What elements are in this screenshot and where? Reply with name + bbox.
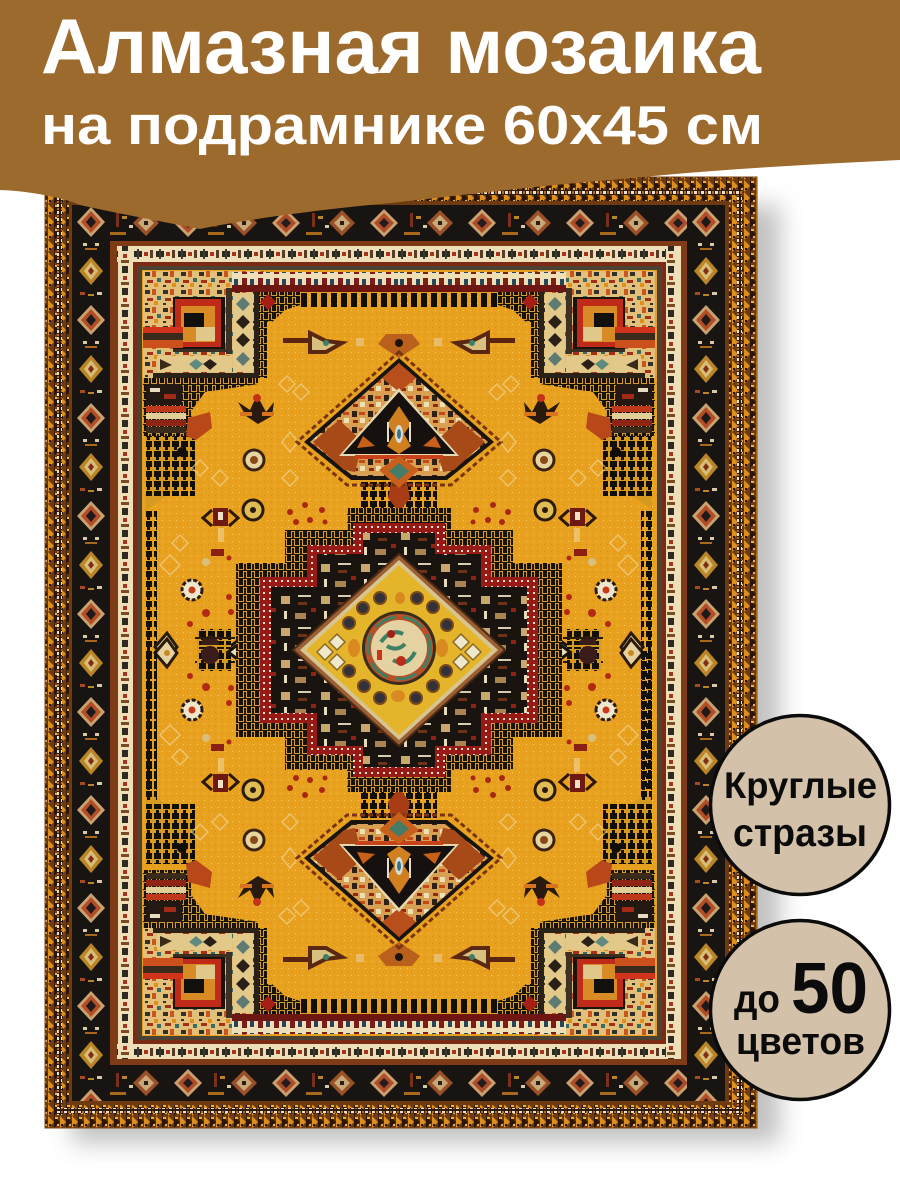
badge text: 50: 50 — [791, 949, 868, 1029]
field motifs: bottom left — [146, 637, 420, 967]
canvas drop shadow — [72, 205, 780, 1143]
grey-brown inner lines — [133, 262, 666, 1044]
outer chevron border — [45, 177, 757, 1128]
corner block: bottom left — [143, 870, 399, 1035]
central round emblem — [362, 611, 436, 685]
title: Алмазная мозаика — [41, 2, 762, 90]
badge text: Круглые: Круглые — [724, 765, 877, 806]
central stepped medallion — [236, 508, 562, 792]
corner block: bottom right — [399, 870, 655, 1035]
lower diamond ornament — [297, 786, 501, 948]
cream diamond stripe — [300, 560, 498, 740]
brown frame line — [69, 201, 729, 1105]
white squares left and right — [317, 634, 481, 670]
central field — [142, 270, 657, 1036]
field left and right tick columns — [146, 650, 652, 800]
cream floral frame top and bottom — [117, 246, 681, 1059]
corner block: top right — [399, 271, 655, 436]
dark block field — [271, 533, 527, 767]
field motifs: top right — [378, 333, 652, 663]
red stepped band — [260, 523, 538, 777]
dark medallion band: bottom — [110, 1065, 687, 1101]
rosette ring — [343, 592, 453, 704]
badge text: цветов: цветов — [736, 1021, 865, 1063]
dark medallion band: left — [72, 205, 110, 1101]
field motifs: bottom right — [378, 637, 652, 967]
subtitle: на подрамнике 60х45 см — [41, 94, 763, 156]
header banner — [0, 0, 900, 229]
dark medallion band: right — [687, 205, 725, 1101]
field motifs: top left — [146, 333, 420, 663]
yellow diamond center — [306, 565, 492, 735]
brown and red inner frame — [110, 241, 687, 1065]
badge: up to 50 colours — [710, 920, 890, 1100]
bead rows of outer border — [57, 190, 742, 1115]
badge: round rhinestones — [710, 716, 890, 894]
corner block: top left — [143, 271, 399, 436]
gold stepped outline — [236, 508, 562, 792]
inner dark line — [137, 266, 662, 1040]
field speckle — [142, 270, 657, 1036]
cream floral frame sides — [118, 246, 681, 1059]
upper diamond ornament — [297, 352, 501, 514]
brown diamond frame — [293, 554, 505, 746]
badge text: стразы: стразы — [733, 812, 867, 855]
diamond mosaic carpet picture — [45, 177, 757, 1128]
dark medallion band: top — [110, 205, 687, 241]
badge text: до: до — [734, 978, 780, 1021]
